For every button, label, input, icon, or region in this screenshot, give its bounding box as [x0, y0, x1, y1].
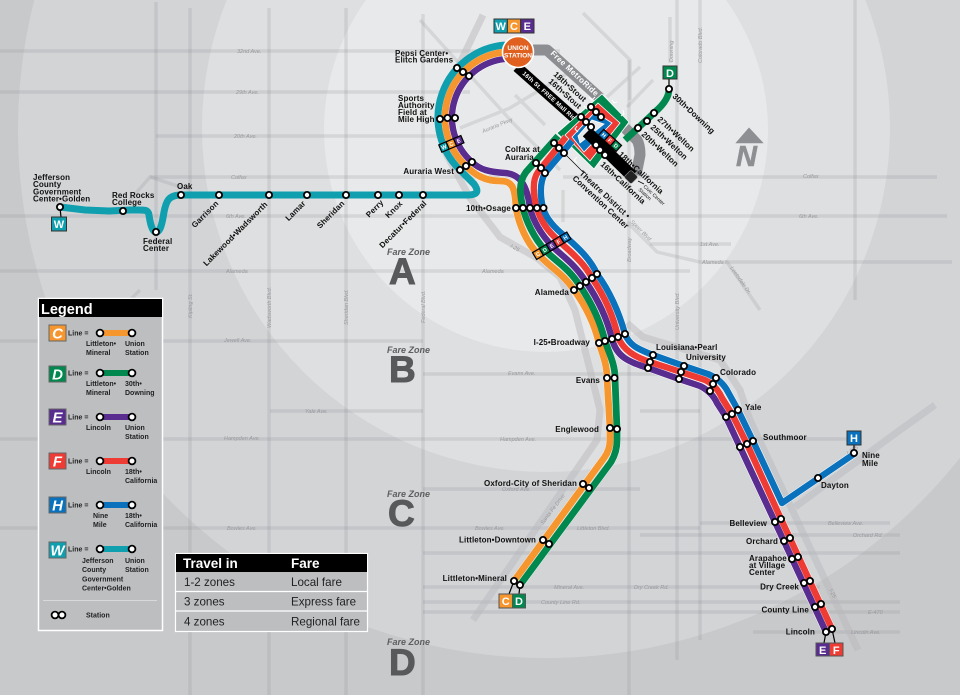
H line [541, 141, 854, 503]
station labels: west corridor: Jefferson [33, 173, 70, 182]
terminal plate: E F: F [833, 645, 840, 657]
station labels: southeast and south corridors: I-25•Broadway [534, 338, 590, 347]
fare zone C label: C [388, 493, 415, 534]
station labels: west corridor: Perry [364, 198, 386, 219]
street names: 1st Ave. [700, 242, 720, 248]
street names: I-225 [846, 444, 860, 457]
fare row: 4 zones: Regional fare [291, 616, 360, 628]
station labels: downtown diagonals: Civic Center [642, 184, 666, 207]
station labels: southeast and south corridors: Dry Creek [760, 582, 799, 592]
fare zone B label: Fare Zone [387, 345, 430, 355]
legend row: H line: H [52, 498, 64, 514]
legend row: C line: Mineral [86, 350, 111, 357]
street names: 6th Ave. [799, 214, 819, 220]
fare row: 4 zones: 4 zones [184, 616, 225, 628]
legend row: station symbol: Station [86, 612, 110, 620]
fare zone A label: A [389, 251, 416, 292]
station labels: downtown diagonals: Theatre District • [578, 169, 632, 220]
legend row: D line: Downing [125, 390, 155, 397]
mall band south of loop with Civic Center Station [587, 132, 638, 184]
street names: Bowles Ave. [227, 526, 257, 532]
terminal plate: W [52, 208, 66, 231]
terminal plate: E F: E [819, 645, 826, 657]
station labels: downtown diagonals: 16th•California [599, 160, 647, 206]
legend row: C line: C [52, 326, 64, 342]
street names: 6th Ave. [226, 214, 246, 220]
line plate on trunk: C D E F H: E [549, 243, 556, 250]
station labels: west corridor: County [33, 180, 62, 189]
station labels: southeast and south corridors: County Line [761, 606, 809, 614]
legend row: C line: Line = [68, 330, 88, 338]
station labels: southeast and south corridors: Lincoln [786, 628, 815, 636]
highways [444, 15, 935, 650]
line plate on trunk: W C E [439, 136, 464, 152]
terminal plate: W C E: C [510, 21, 518, 33]
line plate on trunk: W C E: C [449, 141, 455, 148]
station labels: northwest arc: Elitch Gardens [395, 56, 454, 64]
station labels: west corridor: Federal [143, 237, 172, 246]
station labels: northwest arc: Authority [398, 101, 435, 110]
station labels: west corridor [33, 173, 428, 268]
street names: Santa Fe Drive [540, 493, 567, 526]
legend row: H line: Line = [68, 502, 88, 510]
fare row: 4 zones [184, 616, 360, 628]
fare zone D label: Fare Zone [387, 637, 430, 647]
station labels: southeast and south corridors: Evans [576, 376, 600, 385]
terminal plate: C D: C [502, 596, 510, 608]
legend row: C line [49, 325, 149, 357]
north arrow: N [736, 141, 758, 173]
legend row: W line: Station [125, 567, 149, 574]
F line [534, 137, 832, 629]
legend row: C line: Station [125, 350, 149, 357]
station labels: southeast and south corridors: Louisiana•Pearl [656, 343, 718, 352]
fare row: 3 zones [184, 596, 356, 608]
legend row: H line: California [125, 522, 157, 529]
station labels: southeast and south corridors: University [686, 353, 726, 362]
station labels: southeast and south corridors: Yale [745, 403, 762, 412]
station labels: southeast and south corridors: Colorado [720, 368, 756, 377]
C line [445, 52, 610, 581]
legend heading [39, 299, 162, 318]
station labels: downtown diagonals: 30th•Downing [671, 92, 717, 136]
legend row: D line: D [52, 366, 63, 384]
street names: 29th Ave. [235, 90, 259, 96]
station labels: southeast and south corridors: Southmoor [763, 433, 807, 442]
terminal plate: C D: D [515, 596, 523, 608]
terminal plate: W C E [494, 19, 534, 33]
street names: Belleview Ave. [828, 521, 863, 527]
station labels: downtown diagonals: 20th•Welton [640, 130, 680, 169]
street names: Bowles Ave. [475, 526, 505, 532]
downtown loop diamonds: D, F, H lines [557, 94, 629, 169]
transit lines [60, 45, 854, 632]
station markers [57, 65, 857, 635]
Union Station hub: UNION [507, 45, 529, 52]
fare table header: Fare [291, 556, 320, 571]
street names: Alameda [481, 269, 504, 275]
station labels: northwest arc: Auraria West [403, 167, 454, 176]
free MetroRide shuttle band: Free MetroRide [549, 49, 601, 98]
legend row: E line: Union [125, 425, 145, 432]
Union Station hub: STATION [504, 52, 532, 60]
legend row: H line: Mile [93, 522, 107, 529]
legend row: E line: Station [125, 434, 149, 441]
legend row: F line: 18th• [125, 469, 142, 476]
terminal plate: H [847, 431, 861, 453]
station labels: downtown diagonals: Convention Center [571, 174, 631, 231]
street names: Evans Ave. [508, 371, 536, 377]
terminal plate: D [663, 66, 677, 89]
street names: Auraria Pkwy [481, 117, 515, 135]
station labels: southeast and south corridors: at Village [749, 561, 786, 570]
street names: Oxford Ave. [502, 487, 531, 493]
street names: Colfax [231, 175, 247, 181]
terminal plate: W C E: E [524, 21, 531, 33]
line plate in loop: H F D: H [600, 132, 607, 139]
panel: fare table [176, 554, 368, 632]
legend row: W line [49, 542, 149, 592]
legend row: station symbol [52, 612, 110, 620]
station labels: downtown diagonals: 18th•Stout [552, 70, 588, 104]
terminal plate: E F [816, 629, 843, 657]
leader lines [564, 153, 644, 184]
terminal plate: W: W [54, 219, 65, 231]
street names: Sheridan Blvd. [344, 289, 350, 325]
station labels: northwest arc: Field at [398, 108, 427, 117]
station labels: west corridor: College [112, 198, 142, 207]
line plate on trunk: W C E: E [456, 138, 462, 145]
fare zone C label: Fare Zone [387, 489, 430, 499]
legend row: W line: Center•Golden [82, 586, 131, 592]
street names: Colorado Blvd. [698, 27, 704, 63]
terminal plate: H: H [850, 433, 858, 445]
line plate on trunk: C D E F H: C [535, 251, 542, 258]
station labels: southeast and south corridors: Nine [862, 451, 880, 460]
fare row: 3 zones: 3 zones [184, 596, 225, 608]
street names: Lincoln Ave. [851, 630, 881, 636]
legend row: C line: Union [125, 341, 145, 348]
line plate in loop: H F D: D [612, 143, 619, 150]
Union Station hub [502, 36, 534, 68]
street names: Littleton Blvd. [577, 526, 610, 532]
legend row: W line: Line = [68, 546, 88, 554]
legend row: D line: 30th• [125, 381, 142, 388]
legend row: E line: E [52, 410, 63, 426]
street names: Mineral Ave. [554, 585, 584, 591]
legend row: H line: Nine [93, 513, 108, 520]
street names: Speer Blvd. [629, 219, 653, 244]
legend row: F line [49, 453, 157, 485]
station labels: southeast and south corridors: Littleton•Downtown [459, 536, 536, 544]
station labels: southeast and south corridors: Orchard [746, 537, 778, 546]
line plate on trunk: C D E F H: H [563, 235, 569, 242]
legend row: F line: F [53, 454, 63, 470]
street names: E-470 [868, 610, 884, 616]
station labels: southeast and south corridors: Mile [862, 459, 878, 468]
station labels: west corridor: Knox [384, 199, 405, 220]
terminal plate: D: D [666, 68, 674, 80]
street names: Alameda [225, 269, 248, 275]
street names: Hampden Ave. [224, 436, 260, 442]
station labels: west corridor: Decatur•Federal [378, 199, 428, 250]
station labels: west corridor: Oak [177, 182, 193, 191]
street names: Federal Blvd. [421, 291, 427, 323]
station labels: west corridor: Garrison [190, 199, 220, 230]
fare table header: Travel in [183, 556, 238, 571]
station labels: northwest arc: Mile High [398, 115, 435, 124]
station labels: west corridor: Center [143, 244, 169, 253]
station labels: southeast and south corridors: Belleview [729, 519, 768, 528]
legend row: W line: Union [125, 558, 145, 565]
line plate on trunk: C D E F H [533, 232, 571, 259]
street names [188, 27, 884, 636]
fare zone B label [387, 345, 430, 390]
line plate in loop: H F D: F [606, 138, 613, 145]
station labels: northwest arc: Sports [398, 94, 424, 103]
station labels: northwest arc: Auraria [505, 153, 534, 162]
terminal plate: C D [499, 581, 526, 608]
street names: Yale Ave. [305, 409, 328, 415]
station labels: southeast and south corridors: Littleton•Mineral [443, 574, 507, 583]
street names: University Blvd. [675, 292, 681, 330]
street names: I-25 [827, 588, 837, 600]
legend row: E line: Lincoln [86, 425, 111, 432]
street names: 20th Ave. [233, 134, 257, 140]
fare zone D label [387, 637, 430, 683]
station labels: west corridor: Government [33, 188, 82, 196]
street names: Wadsworth Blvd. [267, 287, 273, 328]
E line [452, 59, 826, 632]
legend row: E line: Line = [68, 414, 88, 422]
station labels: west corridor: Lamar [284, 199, 307, 223]
fare row: 1-2 zones [184, 576, 342, 589]
street names: Jewell Ave. [223, 338, 252, 344]
station labels: downtown diagonals: 16th•Stout [547, 77, 583, 111]
terminal plate: W C E: W [496, 21, 507, 33]
fare zone B label: B [389, 349, 416, 390]
station labels: downtown diagonals: 27th•Welton [656, 115, 696, 154]
station labels: northwest arc: Pepsi Center• [395, 49, 448, 58]
station labels: southeast and south corridors: Arapahoe [749, 554, 787, 563]
station labels: downtown diagonals: Station [637, 187, 652, 202]
station labels: southeast and south corridors [443, 288, 880, 636]
station labels: downtown diagonals [547, 70, 717, 231]
street names: Hampden Ave. [500, 437, 536, 443]
legend row: E line [49, 409, 149, 441]
north arrow [736, 128, 763, 173]
legend row: F line: Lincoln [86, 469, 111, 476]
panel: legend [38, 298, 162, 630]
W line [60, 45, 505, 232]
street names: Dry Creek Rd. [634, 585, 669, 591]
fare table header [176, 554, 367, 572]
legend row: C line: Littleton• [86, 341, 117, 348]
station labels: southeast and south corridors: Oxford-City of Sheridan [484, 479, 577, 488]
free MetroRide shuttle band [533, 49, 640, 175]
legend row: F line: Line = [68, 458, 88, 466]
street names: Colfax [803, 174, 819, 180]
fare zone D label: D [389, 642, 416, 683]
legend row: D line: Mineral [86, 390, 111, 397]
legend row: W line: County [82, 567, 106, 574]
fare zone A label [387, 247, 430, 292]
fare row: 1-2 zones: Local fare [291, 576, 342, 589]
station labels: southeast and south corridors: Center [749, 568, 775, 577]
legend row: H line: 18th• [125, 513, 142, 520]
station labels: west corridor: Sheridan [315, 199, 346, 230]
legend row: W line: Government [82, 576, 124, 584]
station labels: northwest arc [395, 49, 540, 213]
fare zone A label: Fare Zone [387, 247, 430, 257]
legend row: W line: Jefferson [82, 558, 114, 565]
station labels: west corridor: Center•Golden [33, 194, 90, 204]
street names: I-25 [509, 244, 521, 254]
line plate in loop: H F D [598, 129, 622, 151]
legend row: D line: Littleton• [86, 381, 117, 388]
line plate on trunk: W C E: W [441, 144, 449, 152]
station labels: southeast and south corridors: Alameda [535, 288, 569, 297]
street names: Kipling St. [188, 293, 194, 318]
16th Street free mall ride band: 16th St. FREE Mall Ride [521, 71, 579, 125]
fare row: 1-2 zones: 1-2 zones [184, 576, 235, 589]
street names: 32nd Ave. [237, 49, 261, 55]
D line to 30th Downing [625, 89, 669, 140]
legend row: D line: Line = [68, 370, 88, 378]
station labels: west corridor: Red Rocks [112, 191, 155, 200]
street names: Orchard Rd. [853, 533, 883, 539]
street names: Leetsdale Dr. [728, 266, 752, 296]
station labels: northwest arc: 10th•Osage [466, 204, 511, 213]
station labels: southeast and south corridors: Englewood [555, 425, 599, 434]
fare row: 3 zones: Express fare [291, 596, 356, 608]
legend row: D line [49, 366, 155, 397]
fare zone C label [387, 489, 430, 534]
street names: Alameda [701, 260, 724, 266]
legend row: F line: California [125, 478, 157, 485]
street names: Broadway [627, 236, 633, 262]
station labels: downtown diagonals: 18th•California [617, 150, 665, 196]
line plate on trunk: C D E F H: F [556, 239, 563, 246]
D line [520, 136, 617, 585]
station labels: downtown diagonals: 25th•Welton [649, 123, 689, 162]
station labels: west corridor: Lakewood•Wadsworth [202, 200, 269, 268]
legend row: W line: W [50, 542, 66, 560]
station labels: northwest arc: Colfax at [505, 145, 540, 154]
street names: Downing [669, 40, 675, 62]
legend heading: Legend [41, 302, 93, 318]
street names: County Line Rd. [541, 600, 580, 606]
station labels: southeast and south corridors: Dayton [821, 481, 849, 490]
line plate on trunk: C D E F H: D [542, 247, 549, 254]
legend row: H line [49, 497, 157, 529]
